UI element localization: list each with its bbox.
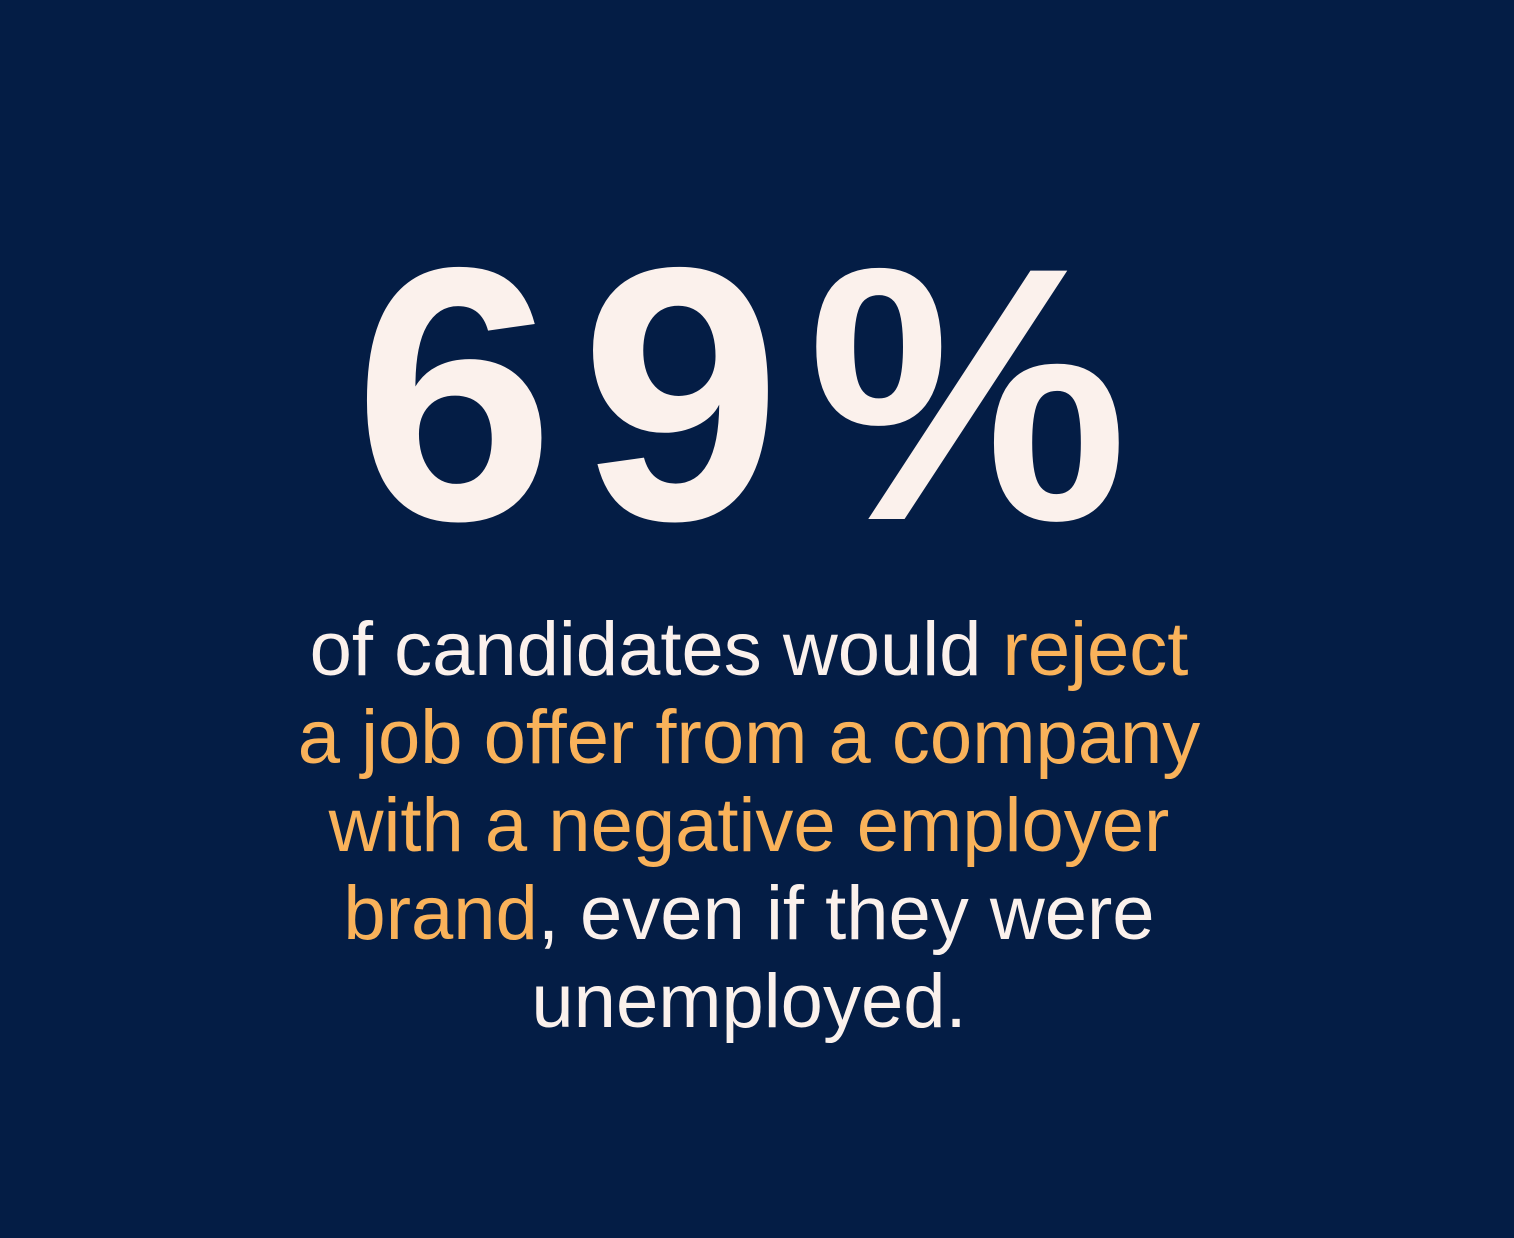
- description text: [298, 607, 1200, 1044]
- description text: unemployed.: [531, 959, 967, 1044]
- description text: of candidates would reject: [310, 607, 1188, 692]
- description text: brand, even if they were: [343, 871, 1155, 956]
- headline statistic: 69%: [354, 192, 1154, 596]
- description text: a job offer from a company: [298, 695, 1200, 780]
- description text: with a negative employer: [329, 783, 1169, 868]
